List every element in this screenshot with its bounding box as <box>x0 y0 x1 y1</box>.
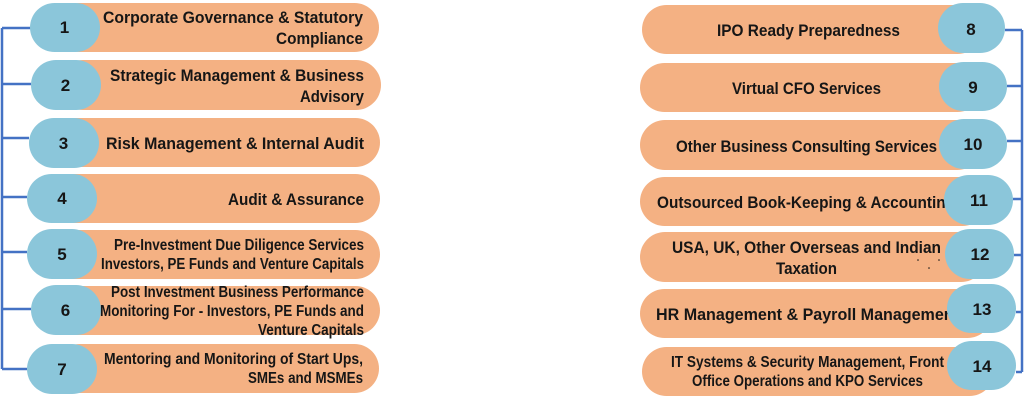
item 1: corporate governance: Compliance <box>276 29 363 48</box>
item 14: IT systems: 14 <box>973 357 992 376</box>
item 5: pre-investment due diligence: Pre-Investment Due Diligence Services <box>114 237 364 254</box>
item 10: other consulting: 10 <box>964 135 982 154</box>
item 1: corporate governance: Corporate Governance & Statutory <box>103 8 364 27</box>
item 9: virtual CFO: Virtual CFO Services <box>732 79 881 98</box>
item 12: taxation: USA, UK, Other Overseas and Indian <box>672 238 941 257</box>
item 4: audit and assurance: 4 <box>57 189 67 208</box>
item 5: pre-investment due diligence <box>27 229 380 279</box>
item 2: strategic management: Strategic Management & Business <box>110 66 364 85</box>
item 13: HR and payroll <box>640 284 1016 338</box>
item 2: strategic management: 2 <box>61 76 70 95</box>
item 12: taxation: 12 <box>971 245 989 264</box>
item 11: outsourced book-keeping: Outsourced Book-Keeping & Accounting <box>657 193 955 212</box>
item 14: IT systems <box>642 341 1016 396</box>
item 10: other consulting <box>640 119 1007 170</box>
item 3: risk management: 3 <box>59 134 68 153</box>
item 14: IT systems: IT Systems & Security Management, Front <box>671 354 944 371</box>
item 12: taxation: Taxation <box>776 259 837 278</box>
item 8: IPO ready <box>642 3 1005 54</box>
item 4: audit and assurance <box>27 174 380 223</box>
left connector bracket <box>2 28 31 369</box>
item 4: audit and assurance: Audit & Assurance <box>228 190 364 209</box>
item 13: HR and payroll: 13 <box>973 300 991 319</box>
item 5: pre-investment due diligence: 5 <box>57 245 67 264</box>
item 1: corporate governance <box>30 3 379 52</box>
right connector bracket <box>1005 30 1022 372</box>
item 10: other consulting: Other Business Consulting Services <box>676 137 937 156</box>
item 3: risk management <box>29 118 380 168</box>
item 9: virtual CFO: 9 <box>968 78 978 97</box>
item 2: strategic management: Advisory <box>300 87 364 106</box>
item 13: HR and payroll: HR Management & Payroll Management <box>656 305 959 324</box>
item 11: outsourced book-keeping <box>640 175 1013 226</box>
item 14: IT systems: Office Operations and KPO Services <box>692 373 923 390</box>
item 2: strategic management <box>31 60 381 110</box>
item 1: corporate governance: 1 <box>60 18 69 37</box>
item 12: taxation <box>640 229 1014 282</box>
item 5: pre-investment due diligence: Investors, PE Funds and Venture Capitals <box>101 256 364 273</box>
item 3: risk management: Risk Management & Internal Audit <box>106 134 364 153</box>
item 6: post investment monitoring: 6 <box>61 301 70 320</box>
item 6: post investment monitoring <box>31 284 380 339</box>
item 6: post investment monitoring: Monitoring For - Investors, PE Funds and <box>100 303 364 320</box>
item 6: post investment monitoring: Post Investment Business Performance <box>111 284 364 301</box>
item 7: mentoring and monitoring <box>27 344 379 394</box>
item 7: mentoring and monitoring: 7 <box>57 360 67 379</box>
item 7: mentoring and monitoring: SMEs and MSMEs <box>248 370 363 387</box>
item 8: IPO ready: 8 <box>966 20 976 39</box>
item 8: IPO ready: IPO Ready Preparedness <box>717 21 900 40</box>
item 11: outsourced book-keeping: 11 <box>970 191 988 210</box>
item 9: virtual CFO <box>640 62 1007 112</box>
item 6: post investment monitoring: Venture Capitals <box>258 322 364 339</box>
item 7: mentoring and monitoring: Mentoring and Monitoring of Start Ups, <box>104 351 363 368</box>
